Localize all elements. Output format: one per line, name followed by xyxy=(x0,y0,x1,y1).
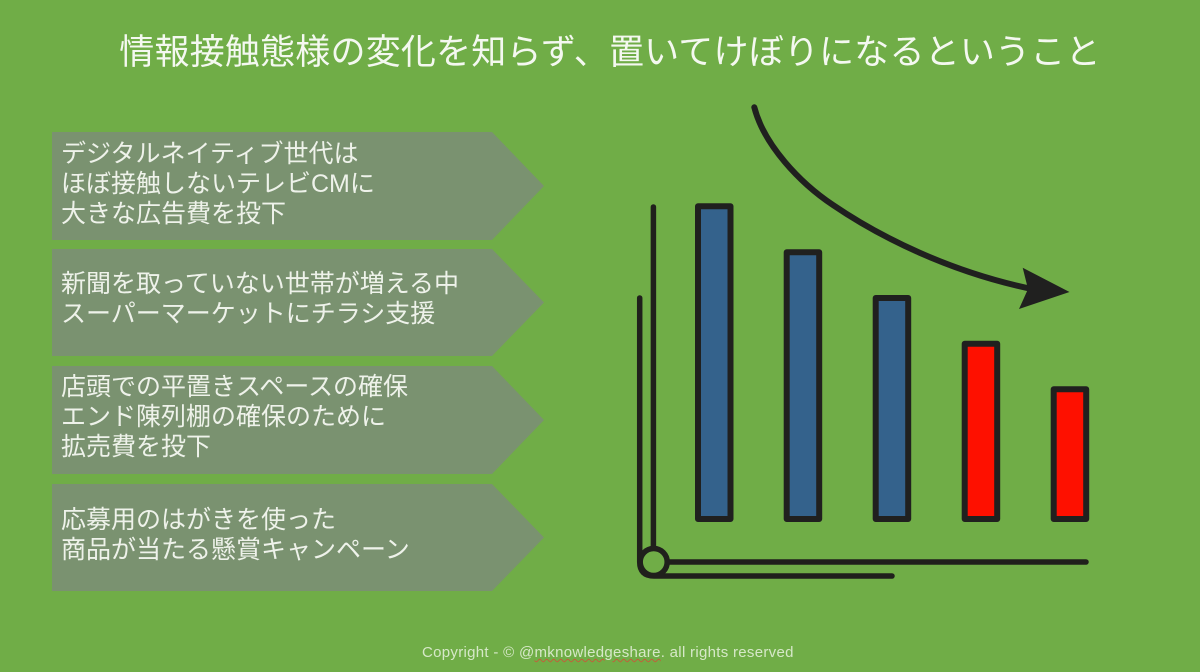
panel: newspaper flyers xyxy=(52,249,544,356)
panel: digital native TV ads xyxy=(52,132,544,240)
title: 情報接触態様の変化を知らず、置いてけぼりになるということ xyxy=(119,33,1101,72)
panel: digital native TV ads: ほぼ接触しないテレビCMに xyxy=(61,170,375,198)
panel: postcard sweepstakes: 商品が当たる懸賞キャンペーン xyxy=(61,536,410,564)
panel: in-store shelf space: 店頭での平置きスペースの確保 xyxy=(61,373,408,401)
copyright footer: Copyright - © @mknowledgeshare. all rights reserved xyxy=(422,644,794,661)
arrow xyxy=(754,107,1070,309)
panel: postcard sweepstakes xyxy=(52,484,544,591)
bar 1 xyxy=(698,206,730,519)
panel: newspaper flyers: スーパーマーケットにチラシ支援 xyxy=(61,300,435,328)
panel: in-store shelf space: 拡売費を投下 xyxy=(61,433,211,461)
panel: in-store shelf space xyxy=(52,366,544,474)
bar 4 xyxy=(965,344,997,519)
axes xyxy=(640,207,1086,576)
panel: postcard sweepstakes: 応募用のはがきを使った xyxy=(61,506,336,534)
bar 5 xyxy=(1054,389,1086,519)
panel: newspaper flyers: 新聞を取っていない世帯が増える中 xyxy=(61,270,459,298)
bar 3 xyxy=(876,298,908,519)
panel: in-store shelf space: エンド陳列棚の確保のために xyxy=(61,403,386,431)
panel: digital native TV ads: 大きな広告費を投下 xyxy=(61,200,286,228)
bar 2 xyxy=(787,252,819,519)
panel: digital native TV ads: デジタルネイティブ世代は xyxy=(61,140,359,168)
